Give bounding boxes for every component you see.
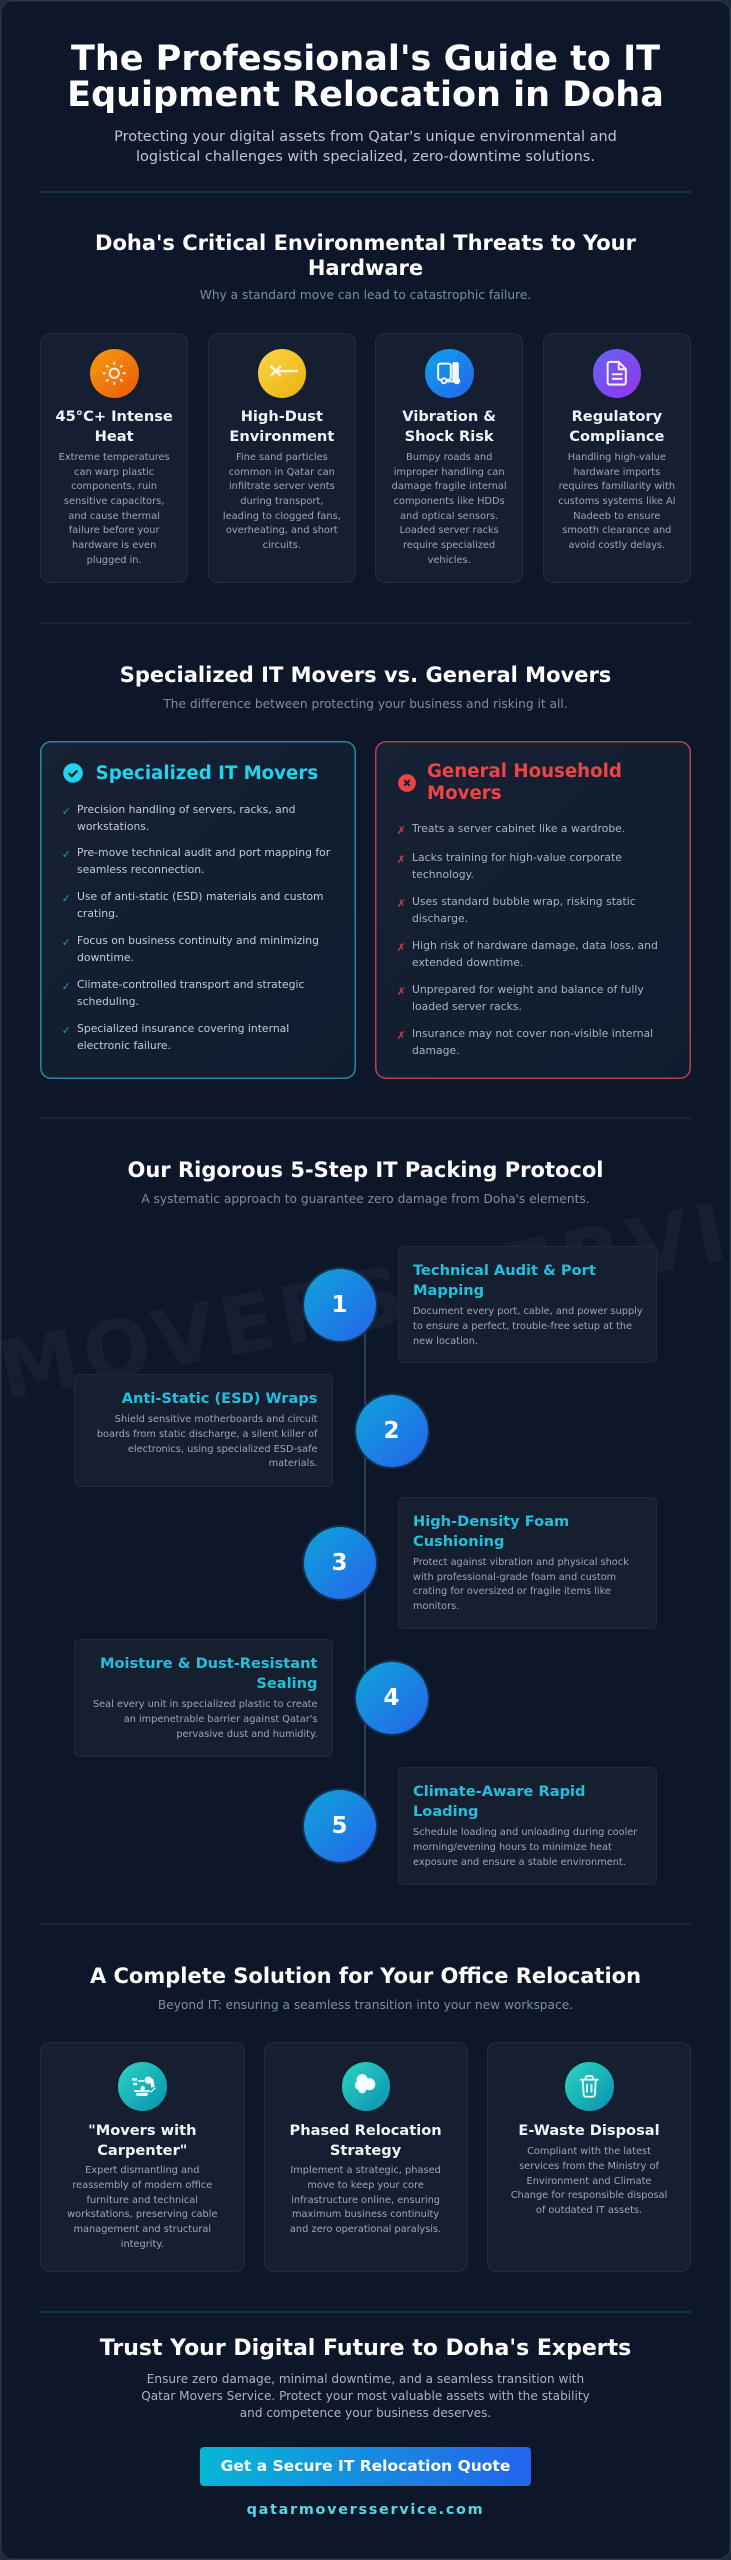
panel title <box>427 761 622 804</box>
call to action button: Get a Secure IT Relocation Quote <box>221 2457 510 2475</box>
step text: Schedule loading and unloading during cooler <box>413 1827 637 1838</box>
step title <box>413 1262 596 1299</box>
step text: new location. <box>413 1336 478 1347</box>
panel title: Specialized IT Movers <box>96 763 318 784</box>
card text: services from the Ministry of <box>519 2161 659 2172</box>
heading: comparison: Specialized IT Movers vs. General Movers <box>120 663 611 687</box>
list: specialized advantages: Use of anti-static (ESD) materials and custom <box>77 890 324 903</box>
card title <box>88 2122 196 2159</box>
card text: common in Qatar can <box>229 467 335 478</box>
card text: of outdated IT assets. <box>536 2205 642 2216</box>
card title <box>229 408 334 445</box>
list: specialized advantages: Focus on business continuity and minimizing <box>77 934 319 947</box>
step 3 number: 3 <box>331 1550 348 1576</box>
card text: plugged in. <box>87 555 142 566</box>
list: specialized advantages: ✓ <box>62 804 71 818</box>
icon: sun <box>90 349 138 398</box>
card text: and cause thermal <box>68 511 160 522</box>
step text: electronics, using specialized ESD-safe <box>128 1444 318 1455</box>
card text: avoid costly delays. <box>568 540 665 551</box>
card text: reassembly of modern office <box>72 2180 212 2191</box>
step title: Cushioning <box>413 1533 504 1550</box>
step 2 number <box>356 1394 428 1466</box>
list: specialized advantages: Pre-move technical audit and port mapping for <box>77 846 330 859</box>
step 2 card <box>74 1374 333 1487</box>
panel: intense heat <box>40 333 188 583</box>
title: The Professional's Guide to IT <box>71 39 660 79</box>
card title: High-Dust <box>241 408 323 425</box>
icon: document <box>593 349 641 398</box>
list: general mover risks <box>397 822 658 1057</box>
timeline line <box>364 1300 366 1826</box>
step text <box>97 1414 318 1469</box>
card title: Environment <box>229 428 334 445</box>
card text <box>290 2165 441 2235</box>
step text <box>413 1557 629 1612</box>
card text: vehicles. <box>428 555 471 566</box>
step title <box>100 1655 318 1692</box>
card text <box>59 452 170 566</box>
list: general mover risks: ✗ <box>397 941 406 954</box>
list: specialized advantages: ✓ <box>62 1024 71 1037</box>
step text <box>93 1699 318 1740</box>
step title: Moisture & Dust-Resistant <box>100 1655 318 1672</box>
step text: crating for oversized or fragile items like <box>413 1586 611 1597</box>
list: general mover risks: discharge. <box>412 912 468 925</box>
step title: High-Density Foam <box>413 1513 569 1530</box>
list: general mover risks: Insurance may not cover non-visible internal <box>412 1027 653 1040</box>
step title <box>413 1513 569 1550</box>
step text: with professional-grade foam and custom <box>413 1572 616 1583</box>
step text: to ensure a perfect, trouble-free setup at the <box>413 1321 632 1332</box>
website url: qatarmoversservice.com <box>247 2502 484 2518</box>
list: specialized advantages: ✓ <box>62 892 71 905</box>
step 5 card <box>398 1767 657 1885</box>
card text: management and structural <box>73 2224 211 2235</box>
step 1 card <box>398 1246 657 1363</box>
heading: environmental threats <box>95 231 636 280</box>
step 4 number: 4 <box>383 1685 400 1711</box>
card title: "Movers with <box>88 2122 196 2139</box>
panel: specialized IT movers <box>40 741 356 1079</box>
step text <box>413 1306 643 1347</box>
list: specialized advantages <box>62 802 330 1052</box>
card text: Change for responsible disposal <box>511 2190 667 2201</box>
list: general mover risks: ✗ <box>397 824 406 837</box>
subheading: environmental threats: Why a standard move can lead to catastrophic failure. <box>200 288 531 302</box>
step text: Protect against vibration and physical shock <box>413 1557 629 1568</box>
icon: dust <box>258 349 306 398</box>
step text: exposure and ensure a stable environment. <box>413 1857 626 1868</box>
icon: truck <box>425 349 474 398</box>
list: general mover risks: Unprepared for weight and balance of fully <box>412 983 644 996</box>
card text: infrastructure online, ensuring <box>291 2195 440 2206</box>
step text: boards from static discharge, a silent killer of <box>97 1429 318 1440</box>
card text: and optical sensors. <box>400 511 498 522</box>
card title <box>402 408 496 445</box>
list: general mover risks: extended downtime. <box>412 956 523 969</box>
list: general mover risks: Lacks training for high-value corporate <box>412 851 622 864</box>
panel: e-waste disposal <box>487 2042 691 2272</box>
icon: trash <box>565 2062 614 2110</box>
card text: sensitive capacitors, <box>64 496 164 507</box>
step text: pervasive dust and humidity. <box>176 1729 318 1740</box>
panel title: Movers <box>427 783 502 804</box>
list: general mover risks: Treats a server cabinet like a wardrobe. <box>412 822 625 835</box>
card text: can warp plastic <box>74 467 154 478</box>
list: specialized advantages: electronic failure. <box>77 1039 171 1052</box>
step 5 number: 5 <box>331 1813 348 1839</box>
card text <box>511 2146 667 2216</box>
icon: carpentry <box>118 2062 166 2110</box>
heading: complete solution: A Complete Solution for Your Office Relocation <box>90 1964 641 1988</box>
panel: movers with carpenter <box>40 2042 245 2272</box>
card text: Bumpy roads and <box>406 452 492 463</box>
step text: Shield sensitive motherboards and circuit <box>115 1414 318 1425</box>
card text: hardware imports <box>573 467 660 478</box>
call to action text: and competence your business deserves. <box>240 2406 491 2420</box>
step 1 number: 1 <box>331 1292 348 1318</box>
card text <box>558 452 675 551</box>
card title: Vibration & <box>402 408 496 425</box>
card text <box>392 452 507 566</box>
card title: Shock Risk <box>405 428 494 445</box>
step 4 card <box>74 1639 333 1757</box>
card text: Implement a strategic, phased <box>290 2165 441 2176</box>
panel: high dust <box>208 333 356 583</box>
step text: Seal every unit in specialized plastic to create <box>93 1699 318 1710</box>
card text: integrity. <box>121 2239 164 2250</box>
card text: overheating, and short <box>226 525 338 536</box>
card text: circuits. <box>263 540 301 551</box>
card title <box>290 2122 442 2159</box>
icon: cloud <box>342 2062 390 2110</box>
icon: cross badge <box>398 774 416 792</box>
card text: furniture and technical <box>87 2195 198 2206</box>
card title: Phased Relocation <box>290 2122 442 2139</box>
card text: customs systems like Al <box>558 496 675 507</box>
card title: Carpenter" <box>97 2142 187 2159</box>
step title: Climate-Aware Rapid <box>413 1783 585 1800</box>
step title: Mapping <box>413 1282 484 1299</box>
title: Equipment Relocation in Doha <box>67 75 664 115</box>
panel: general household movers <box>375 741 691 1079</box>
call to action text <box>141 2372 590 2420</box>
card text: requires familiarity with <box>559 481 675 492</box>
list: specialized advantages: Specialized insurance covering internal <box>77 1022 289 1035</box>
list: specialized advantages: workstations. <box>77 820 149 832</box>
card text: workstations, preserving cable <box>67 2209 218 2220</box>
list: general mover risks: loaded server racks. <box>412 1000 522 1013</box>
subtitle: Protecting your digital assets from Qatar's unique environmental and <box>114 129 617 145</box>
list: specialized advantages: ✓ <box>62 936 71 949</box>
step 5 number <box>304 1790 376 1862</box>
heading: packing protocol: Our Rigorous 5-Step IT Packing Protocol <box>128 1158 604 1182</box>
title <box>67 39 664 115</box>
card title <box>569 408 664 445</box>
list: specialized advantages: ✓ <box>62 848 71 861</box>
card text: leading to clogged fans, <box>223 511 341 522</box>
card text: Fine sand particles <box>236 452 328 463</box>
heading: environmental threats: Hardware <box>308 256 423 280</box>
card text: maximum business continuity <box>292 2209 439 2220</box>
list: general mover risks: ✗ <box>397 853 406 866</box>
card text <box>67 2165 218 2250</box>
panel title: General Household <box>427 761 622 782</box>
panel: phased relocation <box>264 2042 468 2272</box>
list: general mover risks: technology. <box>412 868 474 881</box>
card text: components like HDDs <box>394 496 505 507</box>
step 3 number <box>304 1527 376 1599</box>
card title: Compliance <box>569 428 664 445</box>
call to action text: Ensure zero damage, minimal downtime, and a seamless transition with <box>147 2372 584 2386</box>
step text: monitors. <box>413 1601 459 1612</box>
subheading: packing protocol: A systematic approach to guarantee zero damage from Doha's elements. <box>141 1192 590 1206</box>
subheading: comparison: The difference between protecting your business and risking it all. <box>163 697 568 711</box>
card text: during transport, <box>240 496 323 507</box>
card text: infiltrate server vents <box>229 481 335 492</box>
list: specialized advantages: ✓ <box>62 980 71 993</box>
subtitle: logistical challenges with specialized, zero-downtime solutions. <box>136 149 595 165</box>
heading: call to action: Trust Your Digital Future to Doha's Experts <box>100 2336 631 2360</box>
step title: Anti-Static (ESD) Wraps <box>122 1390 318 1407</box>
step 4 number <box>356 1662 428 1734</box>
step text: materials. <box>269 1458 318 1469</box>
list: general mover risks: ✗ <box>397 985 406 998</box>
icon: check badge <box>63 763 83 783</box>
step title: Sealing <box>256 1675 318 1692</box>
card text: move to keep your core <box>307 2180 424 2191</box>
card text: improper handling can <box>394 467 505 478</box>
card title: Heat <box>95 428 134 445</box>
card title: Regulatory <box>572 408 662 425</box>
step 2 number: 2 <box>383 1418 400 1444</box>
list: general mover risks: High risk of hardware damage, data loss, and <box>412 939 658 952</box>
step text: an impenetrable barrier against Qatar's <box>124 1714 318 1725</box>
card text: damage fragile internal <box>392 481 507 492</box>
step 3 card <box>398 1497 657 1629</box>
card text <box>223 452 341 551</box>
list: specialized advantages: Precision handling of servers, racks, and <box>77 802 295 816</box>
list: specialized advantages: crating. <box>77 907 118 920</box>
step text: Document every port, cable, and power supply <box>413 1306 643 1317</box>
card title <box>56 408 173 445</box>
panel: vibration <box>375 333 523 583</box>
list: general mover risks: ✗ <box>397 897 406 910</box>
list: general mover risks: ✗ <box>397 1029 406 1042</box>
list: specialized advantages: downtime. <box>77 951 134 964</box>
step 1 number <box>304 1269 376 1341</box>
card text: failure before your <box>69 525 160 536</box>
subheading: complete solution: Beyond IT: ensuring a seamless transition into your new workspace. <box>158 1998 573 2012</box>
list: general mover risks: damage. <box>412 1044 460 1057</box>
card text: Expert dismantling and <box>85 2165 199 2176</box>
step text <box>413 1827 638 1868</box>
call to action text: Qatar Movers Service. Protect your most valuable assets with the stability <box>141 2389 590 2403</box>
card title: 45°C+ Intense <box>56 408 173 425</box>
card text: Compliant with the latest <box>527 2146 651 2157</box>
card text: and zero operational paralysis. <box>290 2224 441 2235</box>
list: general mover risks: Uses standard bubble wrap, risking static <box>412 895 636 908</box>
card text: components, ruin <box>71 481 157 492</box>
card text: smooth clearance and <box>562 525 671 536</box>
call to action button <box>200 2447 531 2486</box>
card text: Loaded server racks <box>400 525 499 536</box>
card title: Strategy <box>330 2142 401 2159</box>
card text: Environment and Climate <box>527 2176 651 2187</box>
subtitle <box>114 129 617 165</box>
card text: Handling high-value <box>568 452 666 463</box>
card text: Extreme temperatures <box>59 452 170 463</box>
step title <box>413 1783 585 1820</box>
list: specialized advantages: scheduling. <box>77 995 139 1008</box>
card text: require specialized <box>403 540 495 551</box>
panel: compliance <box>543 333 691 583</box>
list: specialized advantages: seamless reconnection. <box>77 863 204 876</box>
step title: Loading <box>413 1803 478 1820</box>
heading: environmental threats: Doha's Critical Environmental Threats to Your <box>95 231 636 255</box>
card title: E-Waste Disposal <box>518 2122 660 2139</box>
step title: Technical Audit & Port <box>413 1262 596 1279</box>
card text: hardware is even <box>72 540 156 551</box>
card text: Nadeeb to ensure <box>573 511 660 522</box>
step text: morning/evening hours to minimize heat <box>413 1842 612 1853</box>
list: specialized advantages: Climate-controlled transport and strategic <box>77 978 304 991</box>
